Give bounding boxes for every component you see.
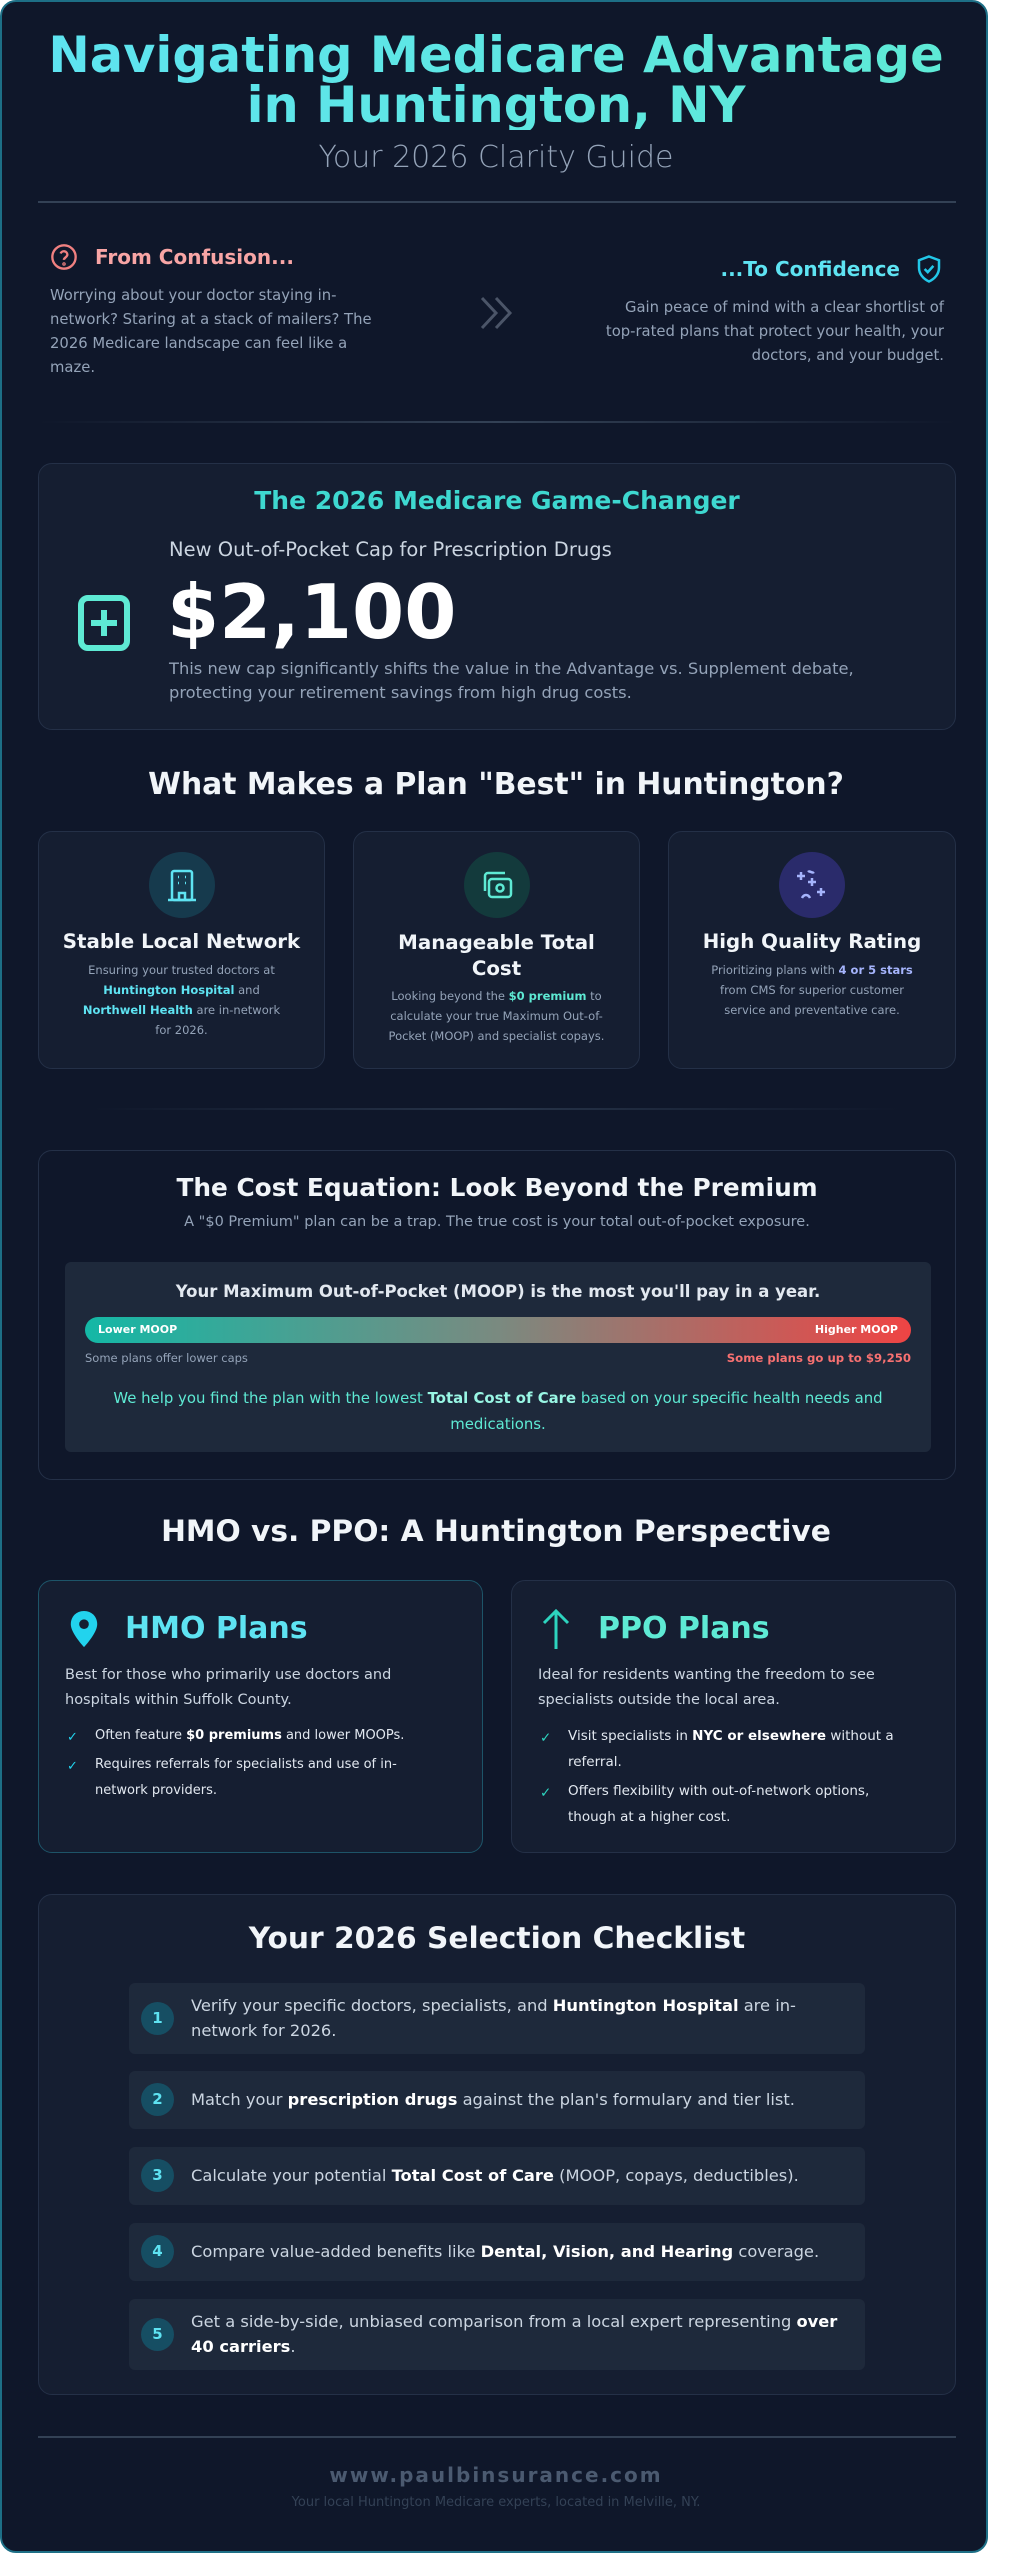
heading: cost equation: The Cost Equation: Look Beyond the Premium	[176, 1173, 818, 1202]
icon: arrow up	[543, 1609, 569, 1649]
label: up to $9,250: Some plans go up to $9,250	[727, 1351, 911, 1365]
list: HMO bullets: Requires referrals for specialists and use of in-	[95, 1757, 397, 1772]
heading: to confidence: ...To Confidence	[720, 257, 900, 281]
card text: calculate your true Maximum Out-of-	[390, 1009, 603, 1023]
footer: tagline: Your local Huntington Medicare experts, located in Melville, NY.	[292, 2495, 700, 2510]
card text	[389, 989, 604, 1043]
item 5: 5	[152, 2325, 163, 2343]
item 5	[129, 2299, 865, 2370]
subtitle: cost equation: A "$0 Premium" plan can be a trap. The true cost is your total out-of-pocket exposure.	[184, 1214, 810, 1230]
arrow: chevrons	[481, 297, 512, 329]
heading: what makes a plan best: What Makes a Plan "Best" in Huntington?	[148, 767, 844, 802]
card text: Pocket (MOOP) and specialist copays.	[389, 1029, 604, 1043]
item 2: 2	[152, 2090, 163, 2108]
text: confusion: maze.	[50, 359, 95, 376]
item 3	[129, 2147, 865, 2205]
list: HMO bullets: ✓	[67, 1759, 78, 1774]
text: help: medications.	[450, 1415, 546, 1433]
item 2: Match your prescription drugs against the plan's formulary and tier list.	[191, 2090, 795, 2109]
label: lower caps: Some plans offer lower caps	[85, 1351, 248, 1365]
panel: checklist	[38, 1894, 956, 2395]
icon: medical plus	[78, 595, 130, 651]
panel: stable local network	[38, 831, 325, 1069]
text: cap description	[168, 659, 854, 702]
list: HMO bullets	[67, 1728, 404, 1798]
list: PPO bullets: ✓	[540, 1730, 551, 1746]
text: cap description: protecting your retirement savings from high drug costs.	[169, 683, 632, 702]
panel: cost equation	[38, 1150, 956, 1480]
heading: HMO plans: HMO Plans	[125, 1611, 308, 1646]
panel: HMO	[38, 1580, 483, 1853]
card text	[711, 963, 913, 1017]
text: confusion: 2026 Medicare landscape can feel like a	[50, 335, 347, 352]
text: PPO description: Ideal for residents wanting the freedom to see	[538, 1667, 875, 1683]
text: confidence	[606, 299, 944, 364]
icon: money	[464, 852, 530, 918]
item 5: 40 carriers.	[191, 2337, 296, 2356]
list: PPO bullets: Offers flexibility with out-of-network options,	[568, 1783, 869, 1799]
item 1: network for 2026.	[191, 2021, 336, 2040]
list: HMO bullets: ✓	[67, 1730, 78, 1745]
panel: PPO	[511, 1580, 956, 1853]
heading: game changer: The 2026 Medicare Game-Changer	[254, 486, 740, 515]
list: HMO bullets: Often feature $0 premiums and lower MOOPs.	[95, 1728, 404, 1743]
card text: Prioritizing plans with 4 or 5 stars	[711, 963, 913, 977]
text: PPO description: specialists outside the local area.	[538, 1692, 780, 1708]
list: HMO bullets: network providers.	[95, 1783, 217, 1798]
panel: high quality rating	[668, 831, 956, 1069]
text: HMO description: hospitals within Suffolk County.	[65, 1692, 292, 1708]
list: PPO bullets: ✓	[540, 1785, 551, 1801]
card text: Northwell Health are in-network	[83, 1003, 280, 1017]
text: PPO description	[538, 1667, 875, 1708]
item 4: 4	[152, 2242, 163, 2260]
panel: game-changer	[38, 463, 956, 730]
heading: HMO vs PPO: HMO vs. PPO: A Huntington Perspective	[161, 1514, 831, 1549]
item 3: Calculate your potential Total Cost of Care (MOOP, copays, deductibles).	[191, 2166, 799, 2185]
icon: question	[51, 244, 77, 270]
number: $2,100: $2,100	[167, 568, 456, 656]
inner box: MOOP	[65, 1262, 931, 1452]
icon: shield	[918, 255, 940, 283]
item 4	[129, 2223, 865, 2281]
card title: Cost	[472, 957, 521, 980]
label: cap: New Out-of-Pocket Cap for Prescription Drugs	[169, 538, 612, 561]
text: help: We help you find the plan with the lowest Total Cost of Care based on your specific health needs and	[113, 1389, 883, 1407]
heading: from confusion: From Confusion...	[95, 245, 294, 269]
item 1: 1	[152, 2009, 163, 2027]
from confusion block	[50, 244, 372, 376]
text: help	[113, 1389, 883, 1433]
list: PPO bullets: Visit specialists in NYC or elsewhere without a	[568, 1728, 894, 1744]
panel: manageable total cost	[353, 831, 640, 1069]
text: confusion	[50, 287, 372, 376]
heading: MOOP: Your Maximum Out-of-Pocket (MOOP) is the most you'll pay in a year.	[176, 1282, 820, 1301]
card title	[398, 931, 595, 980]
text: cap description: This new cap significantly shifts the value in the Advantage vs. Supplement debate,	[169, 659, 854, 678]
item 2	[129, 2071, 865, 2129]
icon: building	[149, 852, 215, 918]
card text: for 2026.	[155, 1023, 208, 1037]
text: confidence: doctors, and your budget.	[752, 347, 944, 364]
item 3: 3	[152, 2166, 163, 2184]
text: confidence: top-rated plans that protect your health, your	[606, 323, 944, 340]
card text: from CMS for superior customer	[720, 983, 904, 997]
card text: Ensuring your trusted doctors at	[88, 963, 275, 977]
bar: MOOP gradient	[85, 1317, 911, 1343]
text: confidence: Gain peace of mind with a clear shortlist of	[625, 299, 944, 316]
footer: website: www.paulbinsurance.com	[329, 2463, 663, 2487]
to confidence block	[606, 255, 944, 364]
card title: Stable Local Network	[63, 930, 300, 953]
card text: service and preventative care.	[724, 1003, 900, 1017]
item 5: Get a side-by-side, unbiased comparison from a local expert representing over	[191, 2312, 837, 2331]
card text: Huntington Hospital and	[103, 983, 260, 997]
subtitle: Your 2026 Clarity Guide	[319, 140, 673, 175]
item 4: Compare value-added benefits like Dental, Vision, and Hearing coverage.	[191, 2242, 819, 2261]
card title: Manageable Total	[398, 931, 595, 954]
bar: MOOP gradient: Lower MOOP	[98, 1323, 177, 1336]
text: confusion: network? Staring at a stack of mailers? The	[50, 311, 372, 328]
list: PPO bullets	[540, 1728, 894, 1825]
heading: PPO plans: PPO Plans	[598, 1611, 770, 1646]
card text: Looking beyond the $0 premium to	[391, 989, 602, 1003]
card title: High Quality Rating	[703, 930, 921, 953]
icon: stars	[779, 852, 845, 918]
list: PPO bullets: though at a higher cost.	[568, 1809, 730, 1825]
title	[2, 30, 990, 130]
icon: pin	[70, 1611, 98, 1647]
card text	[83, 963, 280, 1037]
text: confusion: Worrying about your doctor staying in-	[50, 287, 336, 304]
text: HMO description	[65, 1667, 391, 1708]
heading: checklist: Your 2026 Selection Checklist	[249, 1921, 745, 1956]
title: in Huntington, NY	[247, 76, 745, 134]
item 1	[129, 1983, 865, 2054]
title: Navigating Medicare Advantage	[48, 26, 944, 84]
text: HMO description: Best for those who primarily use doctors and	[65, 1667, 391, 1683]
list: PPO bullets: referral.	[568, 1754, 622, 1770]
bar: MOOP gradient: Higher MOOP	[815, 1323, 898, 1336]
item 1: Verify your specific doctors, specialists, and Huntington Hospital are in-	[191, 1996, 796, 2015]
